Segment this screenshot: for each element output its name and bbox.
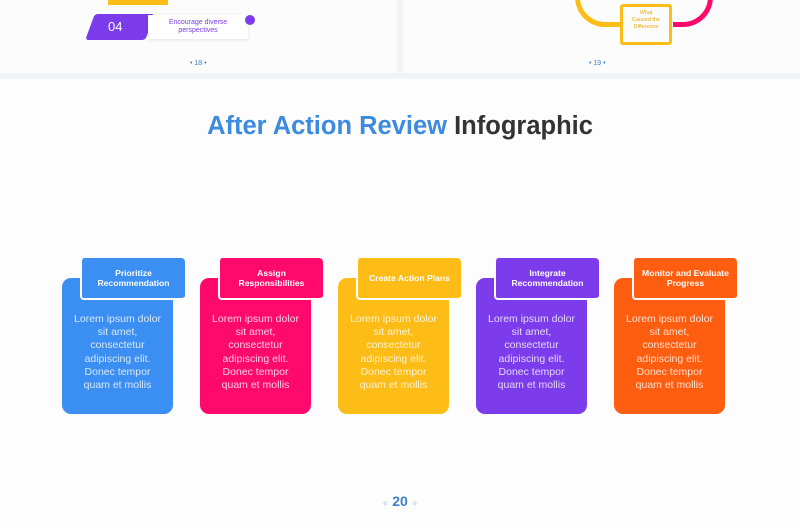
box: what caused the difference: What <box>640 10 652 16</box>
tab 5: Progress <box>667 278 704 288</box>
text 3 <box>350 313 437 391</box>
text 1 <box>74 313 161 391</box>
yellow step fragment <box>108 0 168 5</box>
text 3: Donec tempor <box>361 366 426 378</box>
text 4: consectetur <box>504 339 559 351</box>
tab 1: Prioritize <box>115 268 152 278</box>
panel: slide 19 fragment <box>403 0 800 73</box>
box: what caused the difference <box>620 4 672 45</box>
text 3: sit amet, <box>374 326 413 338</box>
text 2 <box>212 313 299 391</box>
text 4: quam et mollis <box>498 379 565 391</box>
text 1: adipiscing elit. <box>85 353 150 365</box>
tab 2: Assign <box>257 268 286 278</box>
text 4: sit amet, <box>512 326 551 338</box>
text 4 <box>488 313 575 391</box>
text 4: Donec tempor <box>499 366 564 378</box>
page number 18: • 18 • <box>190 60 207 67</box>
panel: slide 18 fragment: 04 <box>108 19 122 34</box>
step 04 label: Encourage diverse <box>169 19 227 26</box>
text 1: consectetur <box>90 339 145 351</box>
text 1: sit amet, <box>98 326 137 338</box>
text 5: sit amet, <box>650 326 689 338</box>
text 1: Lorem ipsum dolor <box>74 313 161 325</box>
title: After Action Review Infographic <box>207 112 593 140</box>
text 2: quam et mollis <box>222 379 289 391</box>
text 3: consectetur <box>366 339 421 351</box>
text 2: adipiscing elit. <box>223 353 288 365</box>
text 3: quam et mollis <box>360 379 427 391</box>
text 5: adipiscing elit. <box>637 353 702 365</box>
box: what caused the difference: Caused the <box>632 17 660 23</box>
card 5: monitor <box>614 278 725 414</box>
step 04 badge <box>85 14 155 40</box>
text 2: Donec tempor <box>223 366 288 378</box>
dot <box>245 15 255 25</box>
text 2: consectetur <box>228 339 283 351</box>
tab 2: Responsibilities <box>239 278 304 288</box>
text 3: adipiscing elit. <box>361 353 426 365</box>
tab 4 <box>494 258 599 300</box>
tab 3 <box>356 258 461 300</box>
page number 20: ● 20 ● <box>382 493 418 509</box>
text 1: Donec tempor <box>85 366 150 378</box>
step 04 label: perspectives <box>178 27 218 34</box>
text 4: adipiscing elit. <box>499 353 564 365</box>
text 5: consectetur <box>642 339 697 351</box>
text 2: sit amet, <box>236 326 275 338</box>
text 5: Donec tempor <box>637 366 702 378</box>
pink arc <box>673 0 713 27</box>
tab 3: Create Action Plans <box>369 273 450 283</box>
tab 4: Recommendation <box>511 278 584 288</box>
card 1: prioritize <box>62 278 173 414</box>
text 1: quam et mollis <box>84 379 151 391</box>
text 5: Lorem ipsum dolor <box>626 313 713 325</box>
tab 5: Monitor and Evaluate <box>642 268 729 278</box>
box: what caused the difference: Difference <box>634 24 658 30</box>
text 4: Lorem ipsum dolor <box>488 313 575 325</box>
panel: slide 18 fragment <box>0 0 397 73</box>
tab 4: Integrate <box>529 268 566 278</box>
text 2: Lorem ipsum dolor <box>212 313 299 325</box>
tab 1: Recommendation <box>97 278 170 288</box>
step 04 label <box>148 15 248 39</box>
text 5 <box>626 313 713 391</box>
text 3: Lorem ipsum dolor <box>350 313 437 325</box>
card 2: assign <box>200 278 311 414</box>
tab 5 <box>632 258 737 300</box>
tab 2 <box>218 258 323 300</box>
page number 19: • 19 • <box>589 60 606 67</box>
text 5: quam et mollis <box>636 379 703 391</box>
tab 1 <box>80 258 185 300</box>
yellow arc <box>575 0 620 27</box>
card 4: integrate <box>476 278 587 414</box>
card 3: create <box>338 278 449 414</box>
